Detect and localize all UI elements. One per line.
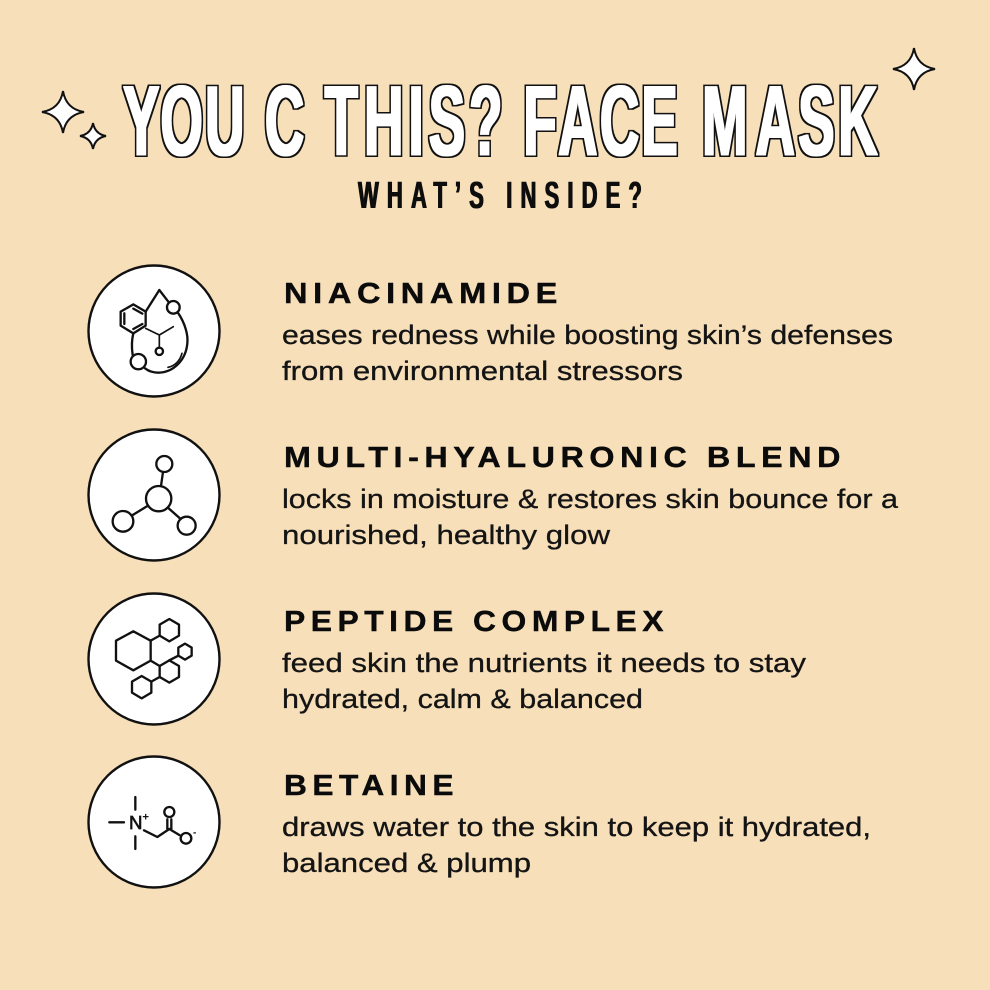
title: YOU: [123, 66, 244, 176]
icon: niacinamide drop: [88, 266, 220, 396]
icon: betaine formula: -: [193, 828, 196, 839]
icon: large sparkle left: [42, 91, 84, 133]
subtitle: WHAT’S INSIDE?: [358, 175, 650, 217]
icon: betaine formula: N: [129, 812, 142, 833]
title: FACE: [523, 66, 678, 176]
text: betaine description: balanced & plump: [282, 848, 531, 878]
panel: multi-hyaluronic blend: [88, 430, 899, 560]
text: peptide description: hydrated, calm & balanced: [282, 684, 643, 714]
text: niacinamide description: eases redness while boosting skin’s defenses: [282, 320, 893, 350]
text: niacinamide description: [282, 320, 893, 386]
icon: molecule: [88, 430, 220, 560]
text: multi-hyaluronic description: locks in moisture & restores skin bounce for a: [282, 484, 899, 514]
heading: multi-hyaluronic blend: MULTI-HYALURONIC BLEND: [284, 442, 846, 474]
text: betaine description: draws water to the skin to keep it hydrated,: [282, 812, 871, 842]
heading: peptide complex: PEPTIDE COMPLEX: [284, 606, 669, 638]
text: niacinamide description: from environmental stressors: [282, 356, 683, 386]
icon: betaine formula: +: [142, 811, 149, 823]
text: betaine description: [282, 812, 871, 878]
title: MASK: [702, 66, 878, 176]
title: THIS?: [325, 66, 502, 176]
icon: small sparkle left: [80, 123, 106, 149]
text: peptide description: feed skin the nutrients it needs to stay: [282, 648, 807, 678]
panel: betaine: [88, 756, 871, 888]
heading: betaine: BETAINE: [284, 770, 459, 802]
heading: niacinamide: NIACINAMIDE: [284, 278, 563, 310]
icon: betaine formula: [88, 756, 220, 888]
icon: hexagon cluster: [88, 594, 220, 724]
icon: sparkle right: [893, 48, 935, 90]
panel: peptide complex: [88, 594, 807, 724]
text: multi-hyaluronic description: nourished, healthy glow: [282, 520, 611, 550]
panel: niacinamide: [88, 266, 893, 396]
text: multi-hyaluronic description: [282, 484, 899, 550]
text: peptide description: [282, 648, 807, 714]
title: [123, 66, 878, 176]
title: C: [265, 66, 304, 176]
